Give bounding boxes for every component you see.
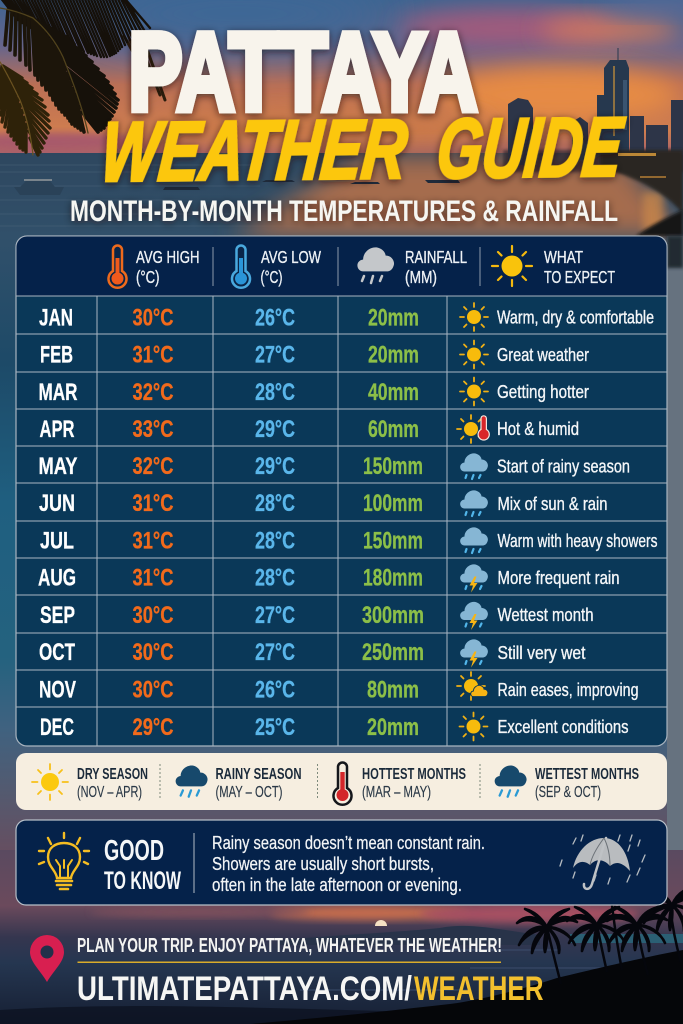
setting sun <box>375 920 387 926</box>
row: October: Still very wet <box>498 643 586 663</box>
row: March: 40mm <box>368 379 419 406</box>
row: April: 33°C <box>132 416 174 443</box>
row: March: 32°C <box>132 379 174 406</box>
row: July: 28°C <box>255 528 295 554</box>
row: February: Great weather <box>497 345 589 365</box>
row: October: 250mm <box>362 639 424 666</box>
row: June: 100mm <box>363 490 423 517</box>
panel: good to know <box>16 820 667 905</box>
row: November: 26°C <box>255 676 295 704</box>
text: rainy season note: Rainy season doesn’t mean constant rain. <box>212 833 485 853</box>
row: November <box>39 672 638 704</box>
header: what to expect <box>544 247 615 287</box>
row: September: 30°C <box>132 602 174 629</box>
icon: blue thermometer <box>232 246 250 288</box>
legend: dry season: (NOV – APR) <box>77 784 142 801</box>
row: May <box>38 453 630 480</box>
row: December: 20mm <box>367 714 419 741</box>
row: April <box>40 415 579 443</box>
row: November: 30°C <box>132 676 174 704</box>
row: June: Mix of sun & rain <box>498 494 608 514</box>
website url: ULTIMATEPATTAYA.COM/ <box>77 970 412 1008</box>
row: August: AUG <box>38 564 76 592</box>
row: September: 27°C <box>255 602 295 629</box>
header: rainfall: RAINFALL <box>405 247 467 267</box>
row: October: 27°C <box>255 639 295 666</box>
row: December: 29°C <box>132 714 174 741</box>
row: November: NOV <box>39 676 76 704</box>
row: August: 31°C <box>132 564 174 592</box>
row: December <box>40 712 628 741</box>
icon: sun <box>492 246 532 286</box>
table header row <box>16 236 667 296</box>
legend: hottest months <box>362 766 466 801</box>
row: February: 20mm <box>368 342 419 369</box>
row: December: 25°C <box>255 714 295 741</box>
row: November: Rain eases, improving <box>498 680 638 700</box>
legend: wettest months: (SEP & OCT) <box>535 784 601 801</box>
row: March: MAR <box>38 379 78 406</box>
header: what to expect: TO EXPECT <box>544 267 615 287</box>
icon: dry season sun <box>32 764 68 800</box>
icon: wettest months cloud <box>495 765 527 797</box>
row: October: 30°C <box>132 639 174 666</box>
header: rainfall <box>405 247 467 287</box>
legend: rainy season: RAINY SEASON <box>216 766 302 783</box>
row: August: More frequent rain <box>498 568 620 588</box>
row: May: 150mm <box>363 453 423 480</box>
title: PATTAYA: PATTAYA <box>128 11 478 134</box>
row: January: 20mm <box>368 304 419 332</box>
row: October <box>39 639 586 668</box>
text: rainy season note <box>212 833 485 895</box>
row: May: Start of rainy season <box>497 456 630 476</box>
icon: light bulb <box>39 833 89 889</box>
row: July: JUL <box>40 528 74 554</box>
row: March: Getting hotter <box>497 382 589 402</box>
table background <box>16 236 667 746</box>
heading: good to know: TO KNOW <box>104 867 181 895</box>
row: May: 32°C <box>132 453 174 480</box>
icon: red thermometer <box>108 246 126 288</box>
row: April: 29°C <box>255 416 295 443</box>
header: what to expect: WHAT <box>544 247 583 267</box>
legend: dry season: DRY SEASON <box>77 766 148 783</box>
row: May: 29°C <box>255 453 295 480</box>
heading: good to know <box>104 835 181 895</box>
icon: hottest months thermometer <box>334 762 352 805</box>
row: April: APR <box>40 416 74 443</box>
title: WEATHER GUIDE: WEATHER <box>97 102 411 199</box>
legend: rainy season <box>216 766 302 801</box>
row: December: DEC <box>40 714 74 741</box>
website url: WEATHER <box>414 970 544 1008</box>
row: July: 150mm <box>363 528 423 554</box>
boats <box>14 179 460 195</box>
panel: season legend <box>16 753 667 810</box>
row: August: 28°C <box>255 564 295 592</box>
header: avg low: (°C) <box>260 267 282 287</box>
text: rainy season note: often in the late afternoon or evening. <box>212 875 462 895</box>
row: August: 180mm <box>363 564 423 592</box>
row: April: Hot & humid <box>497 419 579 439</box>
header: avg high <box>136 247 200 287</box>
heading: good to know: GOOD <box>104 835 164 867</box>
row: July <box>40 527 658 554</box>
panel: monthly weather table <box>16 236 667 746</box>
row: March <box>38 378 589 406</box>
legend: wettest months: WETTEST MONTHS <box>535 766 639 783</box>
call to action: PLAN YOUR TRIP. ENJOY PATTAYA, WHATEVER THE WEATHER! <box>77 935 502 957</box>
legend: dry season <box>77 766 148 801</box>
row: June: 28°C <box>255 490 295 517</box>
row: February: FEB <box>40 342 73 369</box>
text: rainy season note: Showers are usually short bursts, <box>212 854 434 874</box>
legend: wettest months <box>535 766 639 801</box>
row: June: JUN <box>39 490 75 517</box>
row: January: 30°C <box>132 304 174 332</box>
row: February <box>40 340 589 369</box>
row: January <box>39 303 654 332</box>
row: January: 26°C <box>255 304 295 332</box>
row: February: 27°C <box>255 342 295 369</box>
row: August <box>38 564 620 592</box>
row: July: 31°C <box>132 528 174 554</box>
row: March: 28°C <box>255 379 295 406</box>
row: September: Wettest month <box>498 605 594 625</box>
legend: hottest months: (MAR – MAY) <box>362 784 431 801</box>
icon: location pin <box>30 935 64 982</box>
row: January: JAN <box>39 304 73 332</box>
row: June: 31°C <box>132 490 174 517</box>
header: avg low: AVG LOW <box>261 247 321 267</box>
header: avg high: (°C) <box>136 267 160 287</box>
legend: rainy season: (MAY – OCT) <box>216 784 282 801</box>
icon: rainy season cloud <box>176 765 208 797</box>
row: December: Excellent conditions <box>498 717 628 737</box>
header: rainfall: (MM) <box>405 267 437 287</box>
header: avg high: AVG HIGH <box>136 247 200 267</box>
row: April: 60mm <box>368 416 419 443</box>
header: avg low <box>260 247 321 287</box>
icon: umbrella in rain <box>560 835 645 889</box>
row: September: SEP <box>40 602 75 629</box>
row: February: 31°C <box>132 342 174 369</box>
palm trees bottom-right <box>250 887 683 1024</box>
row: May: MAY <box>38 453 78 480</box>
row: September <box>40 602 594 630</box>
legend: hottest months: HOTTEST MONTHS <box>362 766 466 783</box>
row: September: 300mm <box>362 602 424 629</box>
row: October: OCT <box>39 639 75 666</box>
palm fronds top-left <box>0 0 165 155</box>
row: November: 80mm <box>367 676 419 704</box>
row: June <box>39 490 608 517</box>
icon: grey rain cloud <box>357 247 394 283</box>
skyline and shoreline <box>503 48 683 268</box>
